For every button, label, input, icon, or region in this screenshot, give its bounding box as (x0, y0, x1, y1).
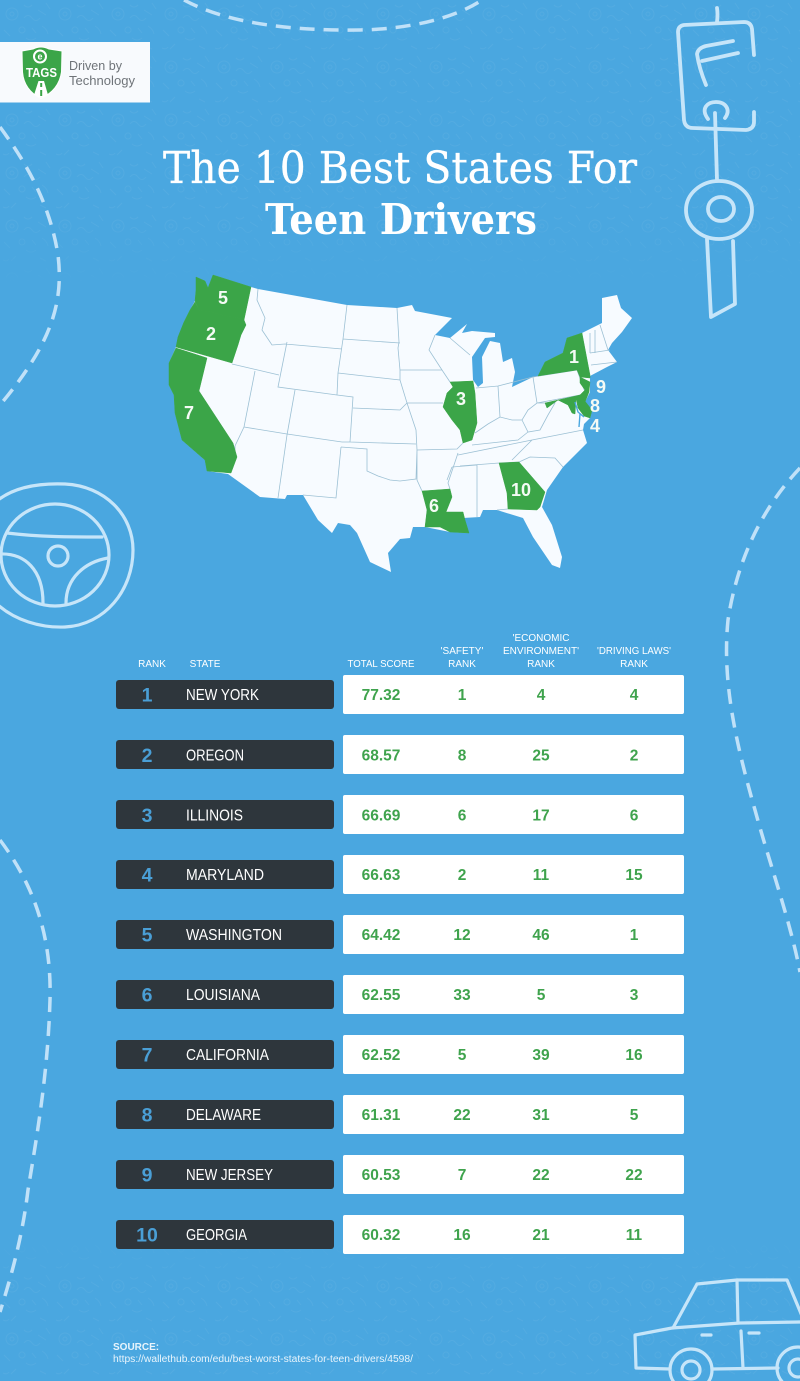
table header (138, 633, 671, 670)
map rank numbers: 1 (569, 347, 579, 367)
map rank numbers: 2 (206, 324, 216, 344)
map rank numbers: 3 (456, 389, 466, 409)
icon: key and tag (678, 8, 754, 317)
row 1: New York: NEW YORK (186, 687, 260, 704)
row 9: New Jersey (116, 1155, 684, 1194)
dashed road: right (727, 468, 800, 972)
row 6: Louisiana: 5 (537, 987, 546, 1004)
row 10: Georgia: 10 (136, 1224, 158, 1246)
row 1: New York: 4 (537, 687, 546, 704)
row 1: New York (116, 675, 684, 714)
map rank numbers: 10 (511, 480, 531, 500)
source note: SOURCE: (113, 1342, 159, 1353)
row 6: Louisiana: 3 (630, 987, 639, 1004)
row 5: Washington: 46 (532, 927, 550, 944)
title (163, 143, 638, 244)
row 4: Maryland (116, 855, 684, 894)
row 8: Delaware: 31 (532, 1107, 550, 1124)
state: Washington (195, 275, 251, 320)
table header: STATE (190, 659, 221, 670)
row 5: Washington: 12 (453, 927, 471, 944)
chesapeake bay line (575, 402, 584, 427)
row 5: Washington (116, 915, 684, 954)
state: Illinois (443, 381, 477, 443)
icon: steering wheel (0, 484, 133, 627)
state: Delaware (576, 395, 592, 418)
row 2: Oregon: 8 (458, 748, 467, 764)
logo shield icon (22, 47, 62, 98)
map rank numbers: 6 (429, 496, 439, 516)
row 6: Louisiana: 62.55 (362, 987, 401, 1004)
table header: 'SAFETY' (441, 646, 483, 657)
row 2: Oregon: 2 (630, 748, 638, 764)
row 9: New Jersey: 22 (532, 1167, 550, 1184)
logo shield icon: TAGS (26, 66, 57, 80)
row 7: California: CALIFORNIA (186, 1047, 270, 1064)
map rank numbers: 9 (596, 377, 606, 397)
state: California (169, 348, 237, 473)
table header: RANK (527, 659, 555, 670)
map rank numbers: 7 (184, 403, 194, 423)
row 9: New Jersey: 22 (625, 1167, 643, 1184)
row 5: Washington: WASHINGTON (186, 927, 282, 944)
row 5: Washington: 5 (142, 924, 153, 946)
map of the United States (169, 275, 632, 572)
row 2: Oregon: OREGON (186, 748, 244, 764)
map state borders (232, 289, 617, 517)
row 7: California: 62.52 (362, 1047, 400, 1064)
row 3: Illinois: 17 (532, 808, 550, 824)
row 4: Maryland: 4 (142, 864, 153, 886)
row 8: Delaware: 22 (453, 1107, 471, 1124)
icon: car (635, 1280, 800, 1381)
row 4: Maryland: 66.63 (362, 867, 401, 884)
map rank numbers (184, 288, 606, 516)
table header: RANK (138, 659, 166, 670)
row 4: Maryland: 11 (533, 867, 550, 884)
row 10: Georgia: 16 (453, 1227, 471, 1244)
row 8: Delaware: DELAWARE (186, 1107, 261, 1124)
row 4: Maryland: 15 (625, 867, 643, 884)
row 1: New York: 77.32 (362, 687, 400, 704)
logo text: Technology (69, 73, 135, 88)
table header: ENVIRONMENT' (503, 646, 579, 657)
row 9: New Jersey: 9 (142, 1164, 153, 1186)
row 5: Washington: 1 (630, 927, 639, 944)
table header: 'ECONOMIC (513, 633, 569, 644)
row 4: Maryland: MARYLAND (186, 867, 264, 884)
row 7: California: 5 (458, 1047, 467, 1064)
logo shield icon: e (37, 52, 43, 62)
row 10: Georgia: GEORGIA (186, 1227, 248, 1244)
state: Louisiana (422, 489, 469, 533)
row 7: California: 39 (532, 1047, 550, 1064)
table header: TOTAL SCORE (348, 659, 415, 670)
dashed road: upper left (0, 127, 59, 405)
row 8: Delaware (116, 1095, 684, 1134)
row 3: Illinois: ILLINOIS (186, 808, 243, 824)
state: Maryland (545, 395, 580, 414)
row 8: Delaware: 61.31 (362, 1107, 401, 1124)
row 7: California: 7 (142, 1044, 152, 1066)
source note: https://wallethub.com/edu/best-worst-states-for-teen-drivers/4598/ (113, 1354, 413, 1365)
row 10: Georgia: 11 (626, 1227, 643, 1244)
row 6: Louisiana (116, 975, 684, 1014)
row 6: Louisiana: 6 (142, 984, 153, 1006)
row 3: Illinois: 66.69 (362, 808, 401, 824)
source note (113, 1342, 413, 1365)
map rank numbers: 5 (218, 288, 228, 308)
logo text (69, 58, 135, 88)
title: Teen Drivers (265, 195, 537, 244)
row 2: Oregon: 25 (532, 748, 550, 764)
dashed road: top (184, 0, 482, 30)
state: Oregon (176, 302, 246, 363)
dashed road: lower left (0, 840, 50, 1312)
row 6: Louisiana: 33 (453, 987, 471, 1004)
map rank numbers: 8 (590, 396, 600, 416)
row 1: New York: 1 (458, 687, 467, 704)
row 4: Maryland: 2 (458, 867, 466, 884)
row 6: Louisiana: LOUISIANA (186, 987, 261, 1004)
row 1: New York: 4 (630, 687, 639, 704)
map rank numbers: 4 (590, 416, 600, 436)
row 2: Oregon: 2 (142, 745, 153, 767)
state: New York (538, 333, 590, 378)
row 10: Georgia (116, 1215, 684, 1254)
row 10: Georgia: 60.32 (362, 1227, 400, 1244)
row 8: Delaware: 5 (630, 1107, 639, 1124)
row 1: New York: 1 (142, 684, 153, 706)
row 5: Washington: 64.42 (362, 927, 400, 944)
map base land (169, 275, 632, 572)
table header: RANK (620, 659, 648, 670)
state: New Jersey (580, 377, 590, 402)
row 9: New Jersey: 7 (458, 1167, 466, 1184)
row 2: Oregon (116, 735, 684, 774)
table header: RANK (448, 659, 476, 670)
logo text: Driven by (69, 58, 122, 73)
row 3: Illinois: 6 (630, 808, 639, 824)
row 8: Delaware: 8 (142, 1104, 153, 1126)
title: The 10 Best States For (163, 143, 638, 194)
row 7: California (116, 1035, 684, 1074)
row 3: Illinois (116, 795, 684, 834)
logo panel (0, 42, 150, 102)
row 10: Georgia: 21 (532, 1227, 550, 1244)
row 3: Illinois: 3 (142, 805, 153, 827)
row 3: Illinois: 6 (458, 808, 467, 824)
table header: 'DRIVING LAWS' (597, 646, 671, 657)
row 9: New Jersey: NEW JERSEY (186, 1167, 273, 1184)
row 9: New Jersey: 60.53 (362, 1167, 401, 1184)
row 2: Oregon: 68.57 (362, 748, 400, 764)
state: Georgia (499, 462, 545, 510)
row 7: California: 16 (625, 1047, 643, 1064)
